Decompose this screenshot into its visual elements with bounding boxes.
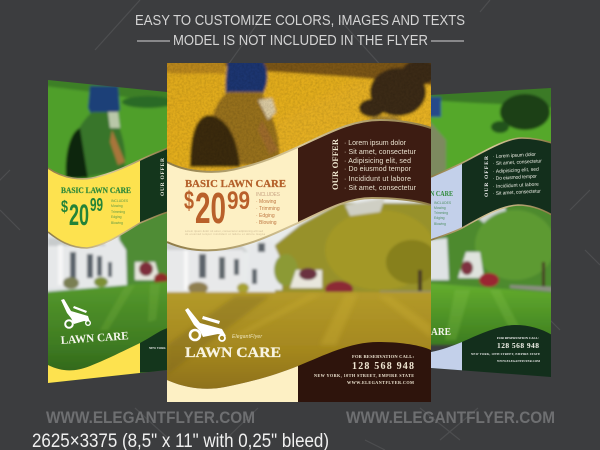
right flyer text: · Sit amet, consectetur (493, 158, 542, 167)
left lower photo (48, 213, 167, 383)
right flyer text: · Lorem ipsum dolor (493, 152, 536, 160)
right flyer text: Blowing (434, 222, 446, 226)
person with blue hat (190, 60, 279, 167)
price: 99 (227, 187, 250, 215)
our offer vertical label: OUR OFFER (330, 138, 340, 190)
contact block: FOR RESERVATION CALL: (352, 354, 414, 359)
includes list: · Edging (256, 213, 275, 219)
flyer: right green and blue (427, 84, 555, 378)
right flyer text: Edging (434, 216, 445, 220)
price: 20 (195, 184, 226, 233)
contact block (314, 354, 414, 385)
left flyer text: Blowing (111, 221, 123, 225)
right flyer text: Mowing (434, 206, 446, 210)
right flyer text: · Do eiusmod tempor (493, 174, 537, 182)
right flyer text: Trimming (434, 211, 448, 215)
left flyer text: INCLUDES (111, 199, 129, 203)
flyer: left green and yellow (48, 80, 167, 383)
flyer: center brown and cream (163, 59, 438, 404)
top caption (135, 12, 465, 49)
price (184, 190, 250, 224)
icon: left mower (61, 299, 90, 328)
contact block: NEW YORK, 10TH STREET, EMPIRE STATE (314, 373, 414, 378)
left flyer text: 99 (90, 195, 103, 215)
left flyer text: BASIC LAWN CARE (61, 186, 131, 195)
includes list (256, 192, 281, 226)
right lower photo (427, 200, 555, 345)
top caption: EASY TO CUSTOMIZE COLORS, IMAGES AND TEXTS (135, 12, 465, 29)
upper photo grain (167, 63, 431, 173)
signature: ElegantFlyer (232, 334, 262, 340)
watermark: right: WWW.ELEGANTFLYER.COM (346, 409, 555, 427)
right flyer text: N CARE (430, 189, 453, 198)
right flyer text: · Sit amet, consectetur (493, 188, 541, 197)
right band blue and dark (431, 138, 552, 240)
watermark: left: WWW.ELEGANTFLYER.COM (46, 409, 255, 427)
left upper photo (48, 80, 167, 178)
upper photo (167, 63, 431, 171)
offer list: · Adipisicing elit, sed (344, 158, 411, 165)
lawn stripes (167, 294, 431, 375)
right flyer text: · Adipisicing elit, sed (493, 167, 539, 175)
fine print (185, 230, 266, 236)
left flyer text: OUR OFFER (160, 157, 166, 196)
includes list: · Trimming (256, 206, 280, 212)
right bottom wave (431, 325, 552, 378)
includes list: · Mowing (256, 199, 277, 205)
includes list: · Blowing (256, 220, 277, 226)
right flyer text: NEW YORK, 10TH STREET, EMPIRE STATE (471, 352, 540, 356)
left flyer text: $ (61, 197, 68, 216)
left flyer text (60, 157, 166, 350)
right flyer text: WWW.ELEGANTFLYER.COM (497, 359, 540, 363)
offer list: · Sit amet, consectetur (344, 149, 417, 156)
fine print: Lorem ipsum dolor sit amet, consectetur adipisicing elit sed (185, 230, 264, 233)
left flyer text: NEW YORK (149, 346, 166, 350)
right flyer text: · Incididunt ut labore (493, 182, 539, 190)
right flyer text (430, 152, 542, 363)
offer list: · Incididunt ut labore (344, 176, 411, 183)
price: $ (184, 185, 194, 215)
right flyer text: ARE (431, 327, 451, 338)
icon: lawn mower (185, 308, 226, 341)
logo text: lawn care: LAWN CARE (185, 345, 281, 361)
bottom wave: cream and brown (167, 342, 431, 402)
contact block: 128 568 948 (352, 361, 414, 372)
left bottom wave (48, 328, 168, 384)
right flyer text: OUR OFFER (484, 155, 490, 197)
heading: basic lawn care: BASIC LAWN CARE (185, 179, 286, 190)
offer list: · Lorem ipsum dolor (344, 140, 407, 147)
offer list: · Do eiusmod tempor (344, 166, 412, 173)
offer list (344, 140, 417, 192)
left flyer text: Edging (111, 215, 122, 219)
left flyer text: 20 (69, 199, 89, 232)
lower photo (167, 199, 431, 389)
left flyer text: Trimming (111, 210, 125, 214)
right upper photo (431, 88, 551, 176)
left flyer text: Mowing (111, 204, 123, 208)
contact block: WWW.ELEGANTFLYER.COM (347, 380, 414, 385)
offer band: cream and brown (167, 120, 431, 250)
offer list: · Sit amet, consectetur (344, 185, 417, 192)
right flyer text: INCLUDES (434, 201, 452, 205)
right flyer text: 128 568 948 (497, 341, 539, 350)
right flyer text: FOR RESERVATION CALL: (497, 336, 539, 340)
left flyer text: LAWN CARE (60, 330, 129, 347)
top caption: MODEL IS NOT INCLUDED IN THE FLYER (173, 32, 428, 49)
includes list: INCLUDES (256, 192, 281, 198)
left band yellow and dark (48, 148, 168, 248)
fine print: do eiusmod tempor incididunt ut labore et dolore magna (185, 233, 266, 236)
